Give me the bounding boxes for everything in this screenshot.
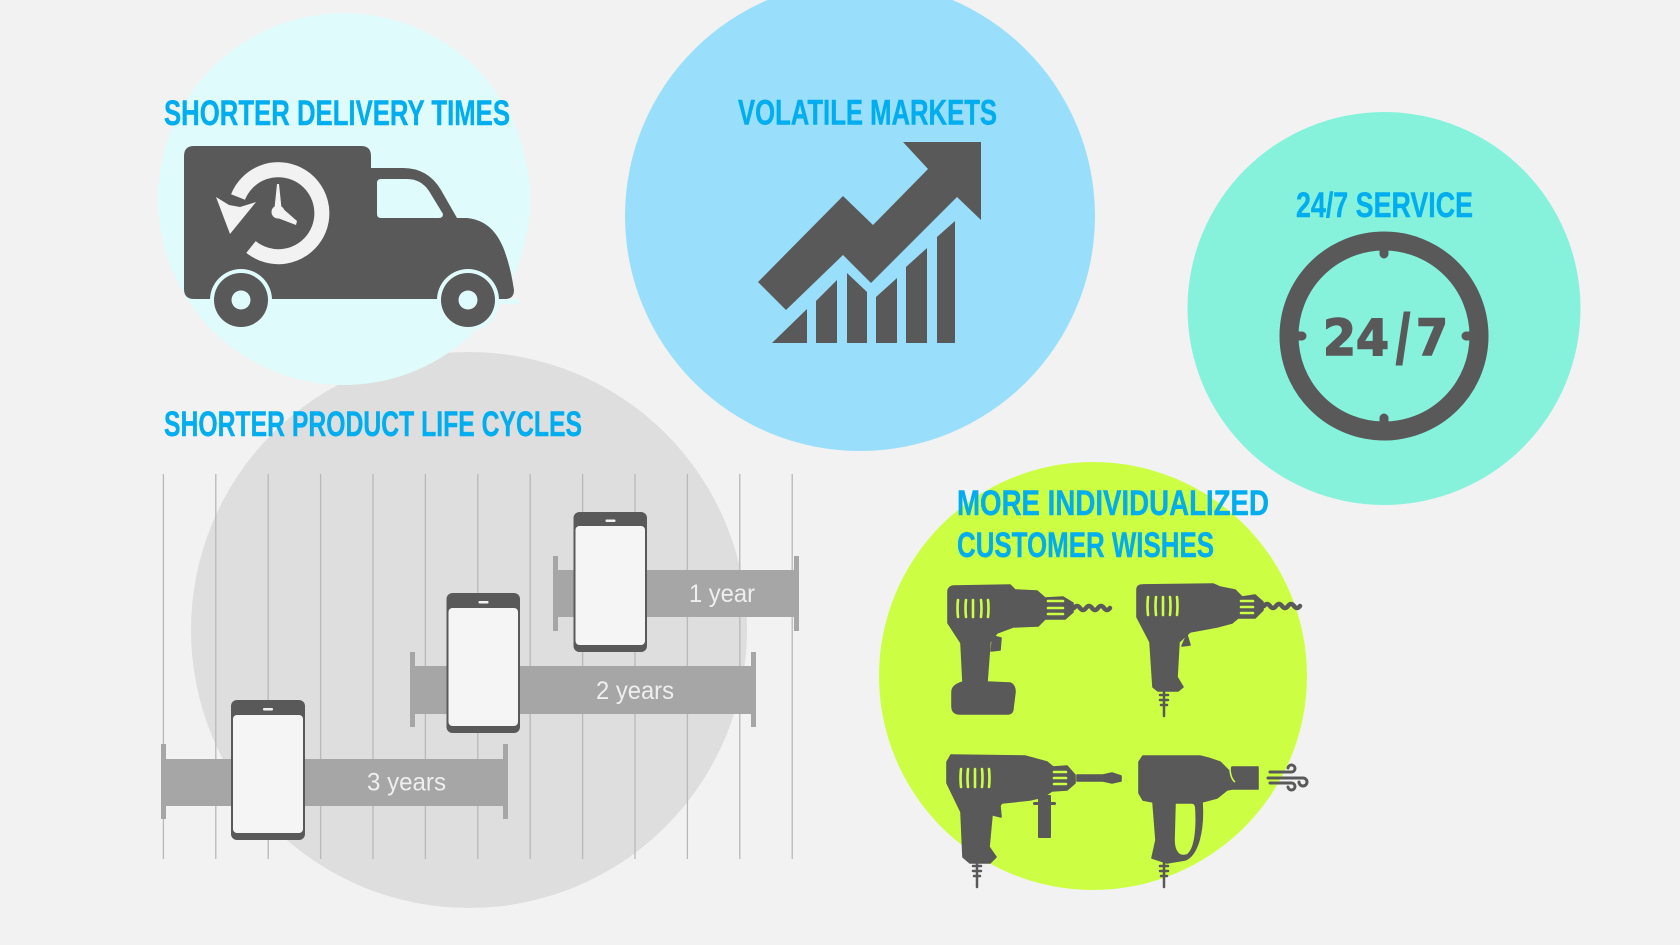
icon: phone at 2 years — [446, 593, 520, 733]
icon: corded drill — [1137, 584, 1300, 716]
heading: more individualized customer wishes: MORE INDIVIDUALIZED — [957, 484, 1269, 523]
icon: hammer drill — [947, 755, 1121, 887]
icon: cordless drill — [948, 585, 1110, 714]
panel: product life cycles background circle — [191, 352, 747, 908]
heading: shorter delivery times: SHORTER DELIVERY TIMES — [164, 94, 510, 133]
icon: 24/7 clock: / — [1395, 300, 1411, 380]
label: 2 years: 2 years — [596, 677, 674, 705]
heading: 24/7 service: 24/7 SERVICE — [1296, 186, 1473, 225]
icon: phone at 3 years — [231, 700, 305, 840]
bar: 2 years — [410, 652, 756, 727]
icon: heat gun — [1139, 756, 1307, 887]
icon: 24/7 clock — [1289, 241, 1479, 431]
heading: volatile markets: VOLATILE MARKETS — [738, 94, 997, 132]
icon: phone at 1 year — [574, 512, 647, 652]
heading: more individualized customer wishes — [957, 484, 1269, 565]
chart: product life cycle timeline — [161, 474, 799, 859]
label: 3 years: 3 years — [367, 768, 446, 796]
icon: 24/7 clock: 24 — [1323, 309, 1389, 367]
icon: rising arrow and bars — [758, 142, 981, 343]
label: 1 year: 1 year — [689, 580, 755, 608]
icon: 24/7 clock: 7 — [1416, 309, 1448, 367]
panel: volatile markets background circle — [625, 0, 1095, 451]
bar: 1 year — [553, 556, 799, 631]
panel: customer wishes background circle — [879, 462, 1307, 890]
heading: shorter product life cycles: SHORTER PRODUCT LIFE CYCLES — [164, 405, 582, 444]
panel: 24/7 service background circle — [1188, 112, 1580, 505]
heading: more individualized customer wishes: CUSTOMER WISHES — [957, 526, 1214, 565]
panel: delivery times background circle — [158, 13, 530, 385]
bar: 3 years — [161, 744, 508, 819]
icon: delivery truck with clock — [184, 146, 519, 331]
